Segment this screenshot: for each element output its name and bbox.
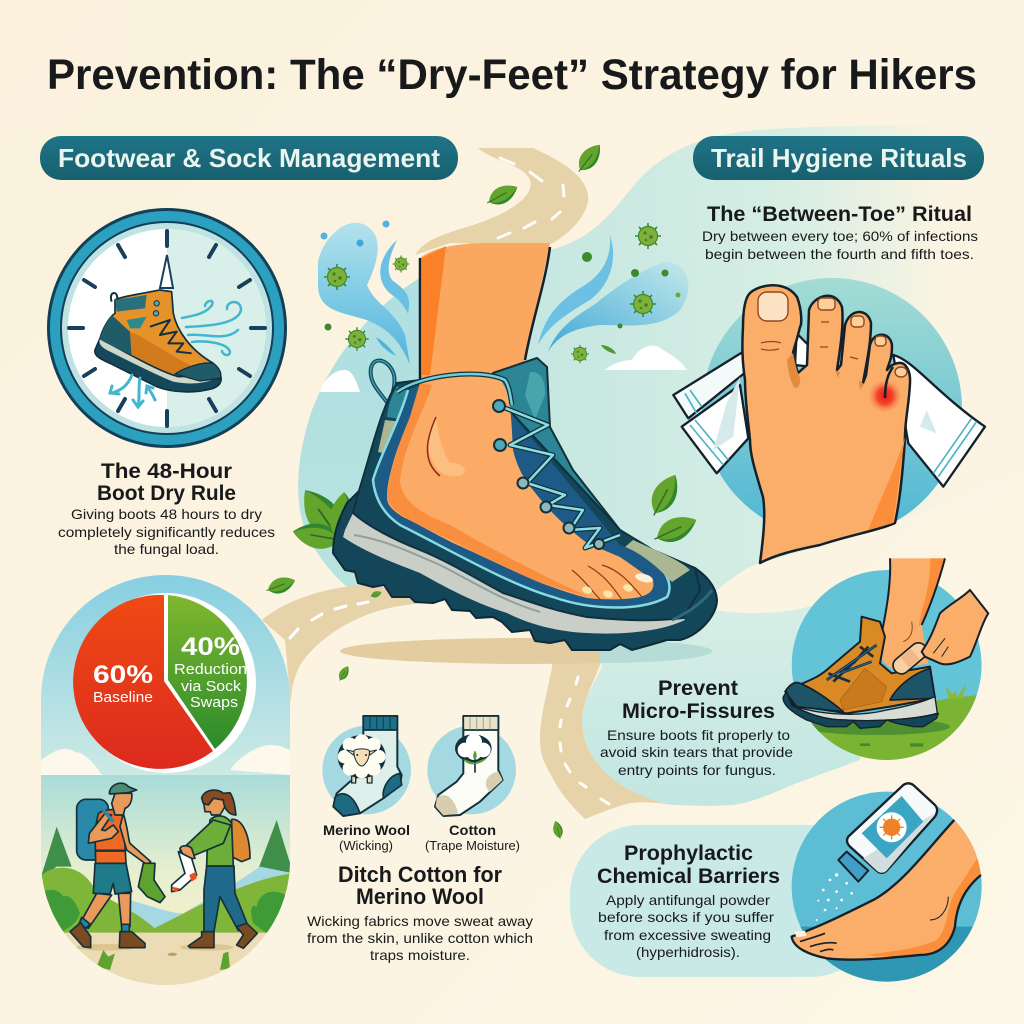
red irritation spot (869, 380, 901, 412)
text: ditch cotton for merino wool: Ditch Cotton for (338, 862, 502, 887)
leaves (264, 140, 701, 840)
midsole (343, 513, 685, 634)
olive toe panel (625, 540, 690, 582)
sole (792, 697, 937, 721)
sock comparison labels: (Wicking) (339, 838, 393, 853)
heel loop (371, 361, 395, 410)
illustration: foot with towel (673, 278, 985, 563)
leg (880, 558, 945, 670)
text: between-toe ritual: Dry between every toe; 60% of infections (702, 228, 978, 244)
text: prophylactic chemical barriers: before socks if you suffer (598, 909, 774, 925)
panel: prophylactic mint background (570, 825, 880, 977)
text: prevent micro-fissures (600, 677, 793, 778)
background: mint blob behind foot (500, 125, 1024, 650)
text: ditch cotton for merino wool: Merino Wool (356, 884, 484, 909)
powder bottle (847, 783, 937, 873)
small hiking boot (95, 290, 221, 392)
text: prophylactic chemical barriers: (hyperhidrosis). (636, 944, 740, 960)
hiker: man holding green sock (70, 783, 165, 948)
sock comparison labels: Cotton (449, 822, 496, 838)
text: prevent micro-fissures: avoid skin tears that provide (600, 744, 793, 760)
icon: cotton sock with boll (427, 716, 516, 816)
water swirl left with fungal spores (318, 220, 410, 365)
text: ditch cotton for merino wool (307, 862, 533, 963)
ankle bone (428, 417, 465, 476)
clock icon: 48-hour boot drying (47, 208, 287, 448)
scenery in zoomed coordinates (40, 820, 293, 993)
text: 48-hour boot dry rule: Giving boots 48 hours to dry (71, 506, 262, 522)
hand (922, 590, 988, 664)
pie chart: 60% (93, 661, 153, 689)
bandage (890, 640, 930, 677)
text: between-toe ritual: The “Between-Toe” Ritual (707, 203, 972, 226)
boot ground shadow (340, 638, 712, 664)
water swirl right with fungal spores (538, 223, 688, 363)
pie chart: 40% (181, 633, 240, 661)
background: mint band around fissures panel (582, 600, 870, 806)
section pill: footwear and sock management (40, 136, 458, 180)
panel: hikers capsule with pie chart (40, 575, 293, 993)
drip arrows (110, 375, 155, 407)
tongue and eyestay (493, 358, 640, 560)
section pill: footwear and sock management: Footwear & Sock Management (58, 143, 440, 173)
text: prophylactic chemical barriers: Prophylactic (624, 842, 753, 865)
text: ditch cotton for merino wool: from the skin, unlike cotton which (307, 930, 533, 946)
boot upper (787, 617, 935, 713)
towel (673, 333, 985, 487)
toe cap highlight (672, 590, 712, 620)
pie chart: Baseline (93, 689, 153, 706)
text: prevent micro-fissures: Micro-Fissures (622, 700, 775, 723)
background: trail lower left (262, 585, 440, 705)
outsole with lugs (333, 450, 717, 650)
text: 48-hour boot dry rule: The 48-Hour (101, 460, 232, 483)
plant behind boot (291, 481, 357, 553)
sheep (352, 775, 372, 783)
text: prophylactic chemical barriers (597, 842, 780, 960)
leg (420, 243, 550, 400)
foot and heel (792, 820, 981, 960)
text: between-toe ritual (702, 203, 978, 262)
sock comparison labels: (Trape Moisture) (425, 838, 520, 853)
background: pale blue teardrop left of boot (298, 270, 440, 595)
clock hand (160, 255, 173, 288)
text: prophylactic chemical barriers: from excessive sweating (604, 927, 771, 943)
section pill: trail hygiene rituals (693, 136, 984, 180)
drying wind lines (182, 301, 241, 355)
text: prevent micro-fissures: Prevent (658, 677, 738, 700)
central illustration: foot inside hiking boot (333, 243, 717, 650)
text: prophylactic chemical barriers: Chemical Barriers (597, 865, 780, 888)
laces (827, 645, 877, 682)
text: 48-hour boot dry rule: the fungal load. (114, 541, 219, 557)
hiker: woman holding white sock (172, 790, 257, 948)
illustration: boot with bandage (783, 558, 988, 763)
title: Prevention: The “Dry-Feet” Strategy for Hikers (47, 51, 977, 99)
pie chart: via Sock (181, 678, 242, 695)
background: trail lower right (540, 660, 673, 819)
powder particles (816, 873, 853, 921)
clouds (320, 346, 687, 392)
background: trail upper (415, 148, 588, 255)
sock comparison labels: Merino Wool (323, 822, 410, 838)
text: 48-hour boot dry rule: Boot Dry Rule (97, 482, 236, 505)
sock comparison labels (323, 822, 520, 853)
icon: merino wool sock with sheep (322, 716, 411, 816)
text: prevent micro-fissures: Ensure boots fit properly to (607, 727, 790, 743)
section pill: trail hygiene rituals: Trail Hygiene Rituals (711, 143, 967, 173)
illustration: powder bottle and foot (792, 783, 982, 987)
text: prevent micro-fissures: entry points for fungus. (618, 762, 776, 778)
laces and eyelets (493, 400, 620, 549)
backing circle (702, 278, 962, 538)
toenails (758, 292, 907, 377)
text: prophylactic chemical barriers: Apply antifungal powder (606, 892, 770, 908)
foot (387, 375, 653, 599)
pie chart: Reduction (174, 661, 247, 678)
upper rear and navy lining (353, 380, 700, 620)
pie chart: Swaps (190, 694, 238, 711)
text: 48-hour boot dry rule: completely significantly reduces (58, 524, 275, 540)
text: ditch cotton for merino wool: Wicking fabrics move sweat away (307, 913, 533, 929)
toes (572, 565, 642, 600)
foot top view (742, 285, 910, 563)
pie chart (73, 593, 256, 773)
text: ditch cotton for merino wool: traps moisture. (370, 947, 470, 963)
boot collar (397, 374, 512, 405)
text: between-toe ritual: begin between the fourth and fifth toes. (705, 246, 974, 262)
text: 48-hour boot dry rule (58, 460, 275, 557)
